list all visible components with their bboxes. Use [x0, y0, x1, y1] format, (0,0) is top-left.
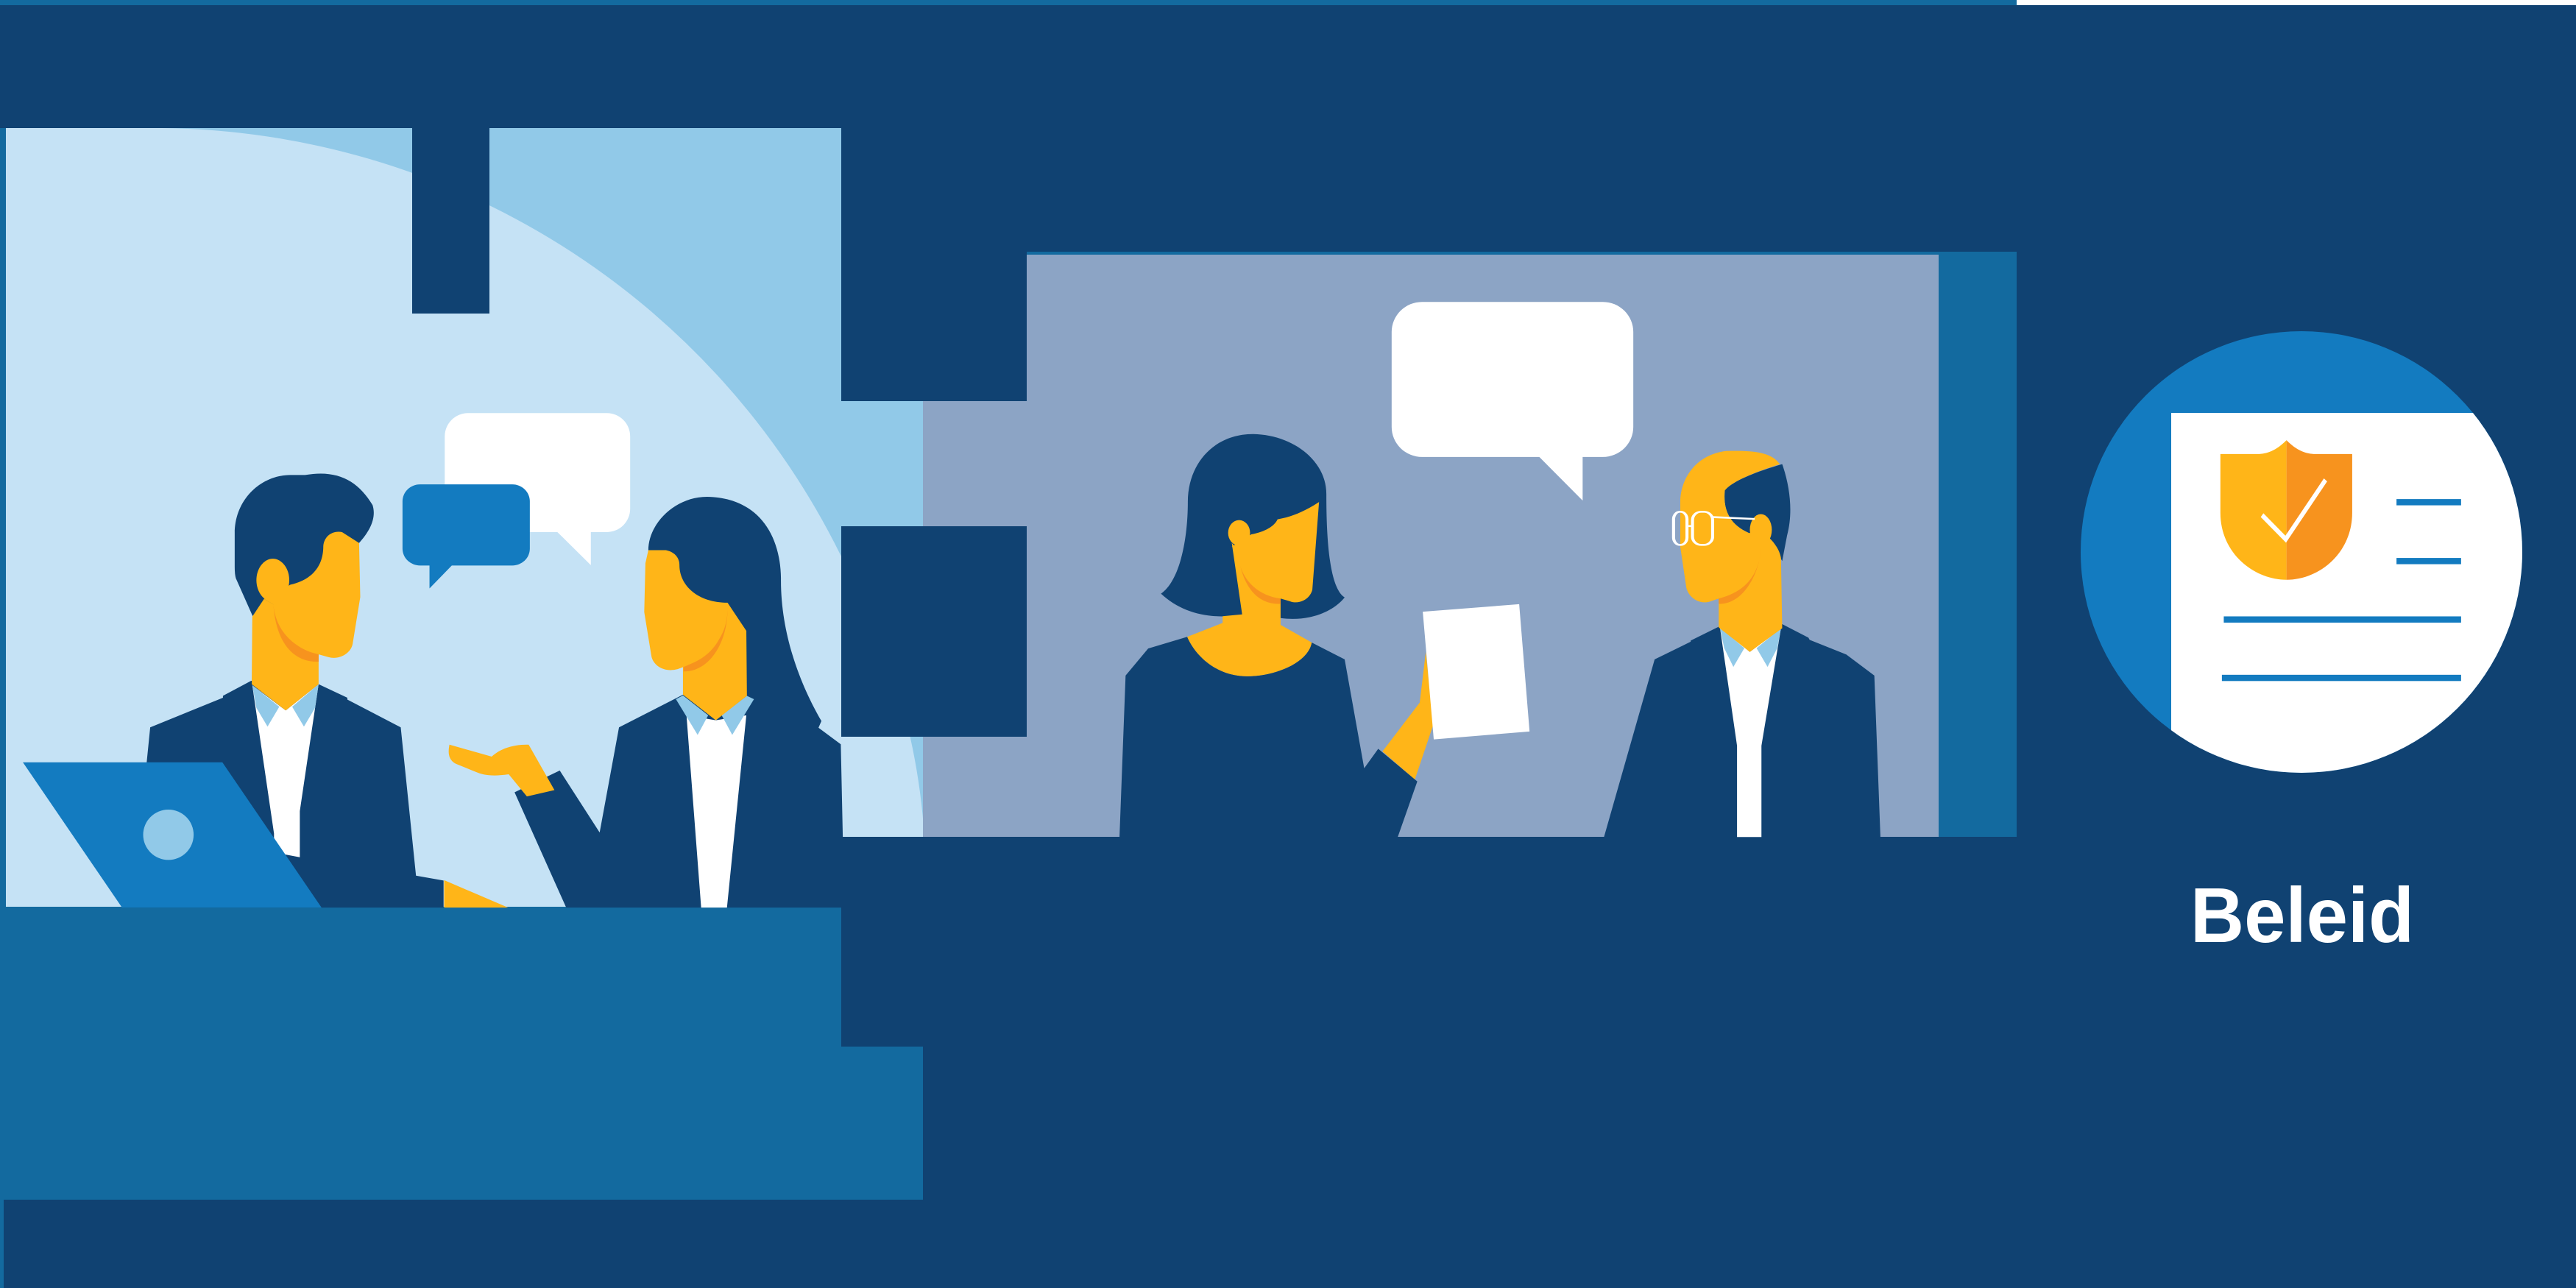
person: woman with document: [1119, 434, 1529, 837]
speech bubble: white: [445, 413, 630, 565]
icon: shield with check and document lines: [2221, 440, 2461, 681]
icon: glasses: [1674, 512, 1755, 545]
icon: policy document in circle: [2081, 331, 2522, 773]
dark structural blocks: [412, 128, 1027, 737]
scene: two colleagues with laptop: [23, 413, 844, 907]
panel: bottom band: [0, 907, 923, 1288]
panel: right meeting backdrop: [923, 252, 2017, 837]
icon: laptop: [23, 762, 322, 907]
person: woman gesturing: [449, 497, 844, 907]
hand fragment: [444, 880, 508, 907]
panel: left meeting backdrop: [0, 128, 924, 907]
person: man with laptop: [123, 473, 444, 907]
heading: Beleid: Beleid: [2190, 872, 2414, 959]
speech bubble: blue: [403, 484, 530, 588]
scene: woman and man with document: [1119, 302, 1880, 837]
speech bubble: large white: [1392, 302, 1633, 500]
person: man with glasses: [1604, 451, 1880, 837]
